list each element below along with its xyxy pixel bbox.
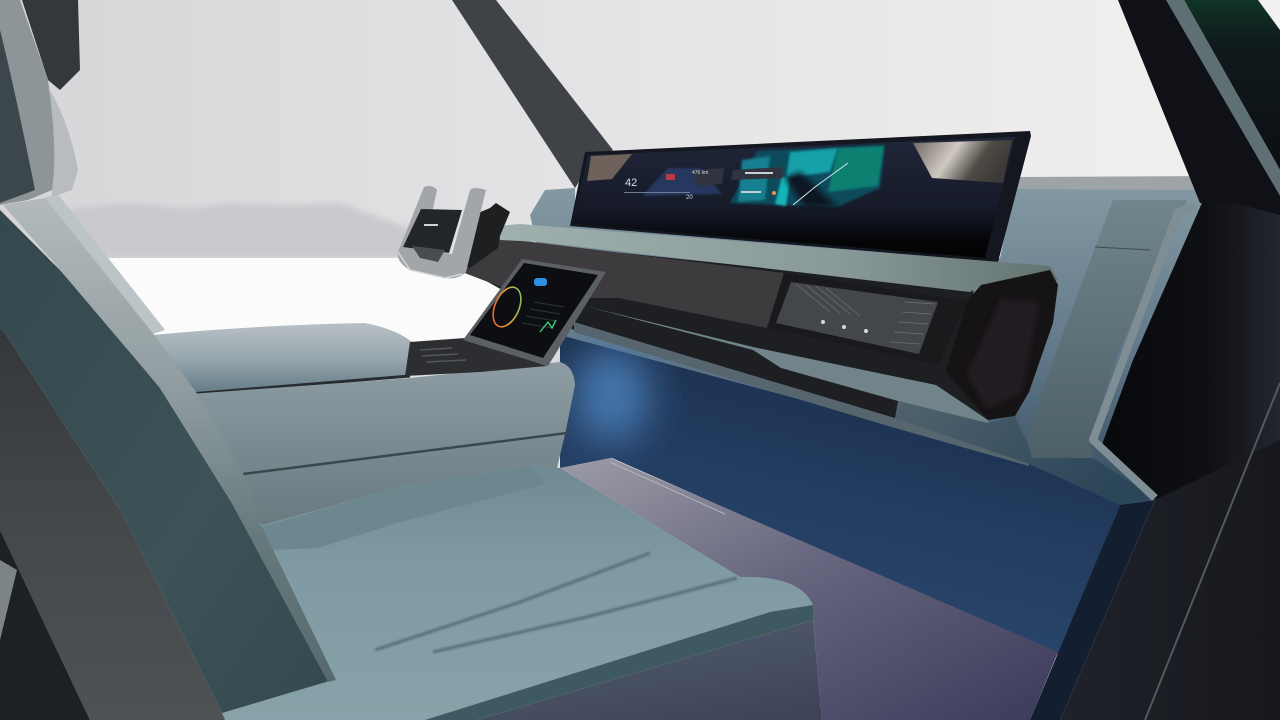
door thin ridge line: [1145, 383, 1280, 720]
seat back light edge band: [3, 198, 336, 682]
dashboard slate base panel: [530, 188, 1236, 512]
dashboard grey fabric strip: [585, 306, 988, 424]
dashboard top shelf: [497, 224, 1058, 292]
A-pillar: [452, 0, 613, 188]
steering column: [455, 203, 510, 268]
3D map: [730, 145, 885, 208]
right camera view: [913, 140, 1012, 183]
driving assist panel: 476 km: [692, 170, 708, 176]
tablet speed gauge: [487, 283, 527, 331]
cushion front edge band: [425, 605, 813, 720]
headrest front band: [0, 0, 54, 205]
armrest shadow line: [190, 376, 410, 394]
door recess: [1100, 190, 1280, 500]
door silver trim: [1093, 206, 1195, 498]
driving assist panel: 20: [686, 195, 693, 201]
console body: [190, 362, 575, 526]
headrest mount: [22, 0, 80, 90]
centre console armrest: [152, 323, 417, 393]
fabric side panel: [1027, 200, 1187, 458]
seat back rear panel: [45, 193, 165, 335]
seat back fabric strip: [0, 210, 333, 713]
door lower panel: [1060, 440, 1280, 720]
dark frame beside floor: [1030, 500, 1155, 720]
lower left window sliver: [0, 560, 17, 640]
navigation cards: [731, 167, 783, 193]
left camera view: [587, 154, 632, 181]
lower left pillar: [0, 530, 90, 720]
foot well: blue wall: [560, 335, 1120, 655]
seat back inner panel: [0, 330, 225, 720]
floor seam: [610, 462, 725, 514]
display bezel: [570, 131, 1031, 262]
seat base front: [222, 620, 822, 720]
driving assist panel: 42: [625, 177, 637, 189]
cushion upper pad: [262, 465, 545, 550]
roof pillar: [1118, 0, 1280, 215]
end cap inner panel: [967, 299, 1039, 409]
fabric panel seam: [1095, 247, 1150, 250]
seat cushion: [222, 465, 813, 720]
roof pillar light strip: [1166, 0, 1280, 196]
console seam line: [243, 433, 567, 474]
cushion creases: [375, 553, 737, 652]
speaker recess: [767, 273, 967, 365]
dashboard upper front face: [462, 238, 784, 328]
driving assist panel: [624, 168, 724, 201]
dashboard recess shadow: [470, 240, 988, 420]
display screen: [572, 137, 1015, 258]
foot well: blue glow: [574, 347, 650, 443]
speaker panel with touch icons: [776, 282, 938, 354]
lower dashboard trim band: [574, 322, 1029, 466]
dashboard lower support: [895, 401, 1155, 505]
roof pillar right section: [1184, 0, 1280, 170]
foot well: floor: [560, 458, 1058, 720]
headrest rear piece: [50, 90, 78, 197]
dashboard end cap: [946, 270, 1058, 420]
console controls recess: [405, 338, 547, 376]
tablet button: [534, 278, 547, 286]
panoramic display: [570, 131, 1031, 262]
tablet chart grid: [522, 302, 564, 328]
yoke steering wheel: [398, 186, 486, 278]
centre touch tablet: [463, 259, 606, 366]
tablet green chart: [540, 320, 556, 332]
back window ledge: [1015, 176, 1232, 190]
headrest fabric: [0, 30, 35, 203]
